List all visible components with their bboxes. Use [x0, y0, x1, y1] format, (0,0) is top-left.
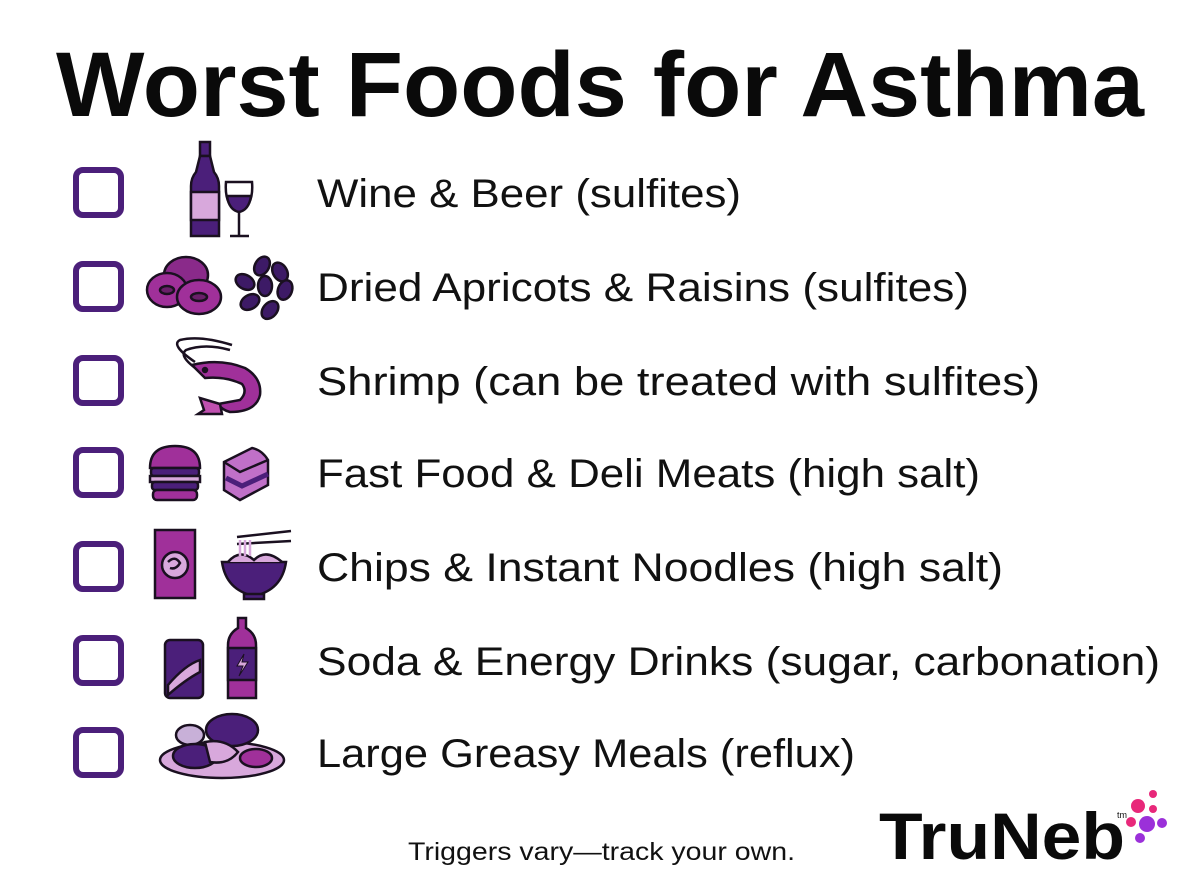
label row 6: Soda & Energy Drinks (sugar, carbonation)	[317, 640, 1160, 684]
checkbox row 2	[76, 264, 121, 309]
footer note: Triggers vary—track your own.	[408, 838, 795, 866]
label row 3: Shrimp (can be treated with sulfites)	[317, 360, 1040, 404]
icon: greasy meal plate	[160, 714, 284, 778]
label row 5: Chips & Instant Noodles (high salt)	[317, 546, 1003, 590]
checkbox row 1	[76, 170, 121, 215]
label row 4: Fast Food & Deli Meats (high salt)	[317, 452, 980, 496]
icon: dried apricots and raisins	[147, 254, 295, 322]
item labels	[317, 172, 1160, 776]
icon: wine bottle and glass	[191, 142, 252, 236]
checkbox row 6	[76, 638, 121, 683]
icon: shrimp	[177, 338, 260, 414]
checkbox row 3	[76, 358, 121, 403]
label row 1: Wine & Beer (sulfites)	[317, 172, 741, 216]
checkbox row 4	[76, 450, 121, 495]
logo: TruNeb: tm	[1117, 810, 1127, 820]
icon: soda can and energy drink	[165, 618, 256, 698]
checklist	[76, 170, 121, 775]
logo: TruNeb: TruNeb	[879, 799, 1125, 873]
icon: chips bag and noodles	[155, 530, 291, 599]
title: Worst Foods for Asthma	[56, 34, 1145, 136]
checkbox row 7	[76, 730, 121, 775]
label row 7: Large Greasy Meals (reflux)	[317, 732, 855, 776]
checkbox row 5	[76, 544, 121, 589]
icon: burger and sandwich	[150, 446, 268, 500]
label row 2: Dried Apricots & Raisins (sulfites)	[317, 266, 969, 310]
